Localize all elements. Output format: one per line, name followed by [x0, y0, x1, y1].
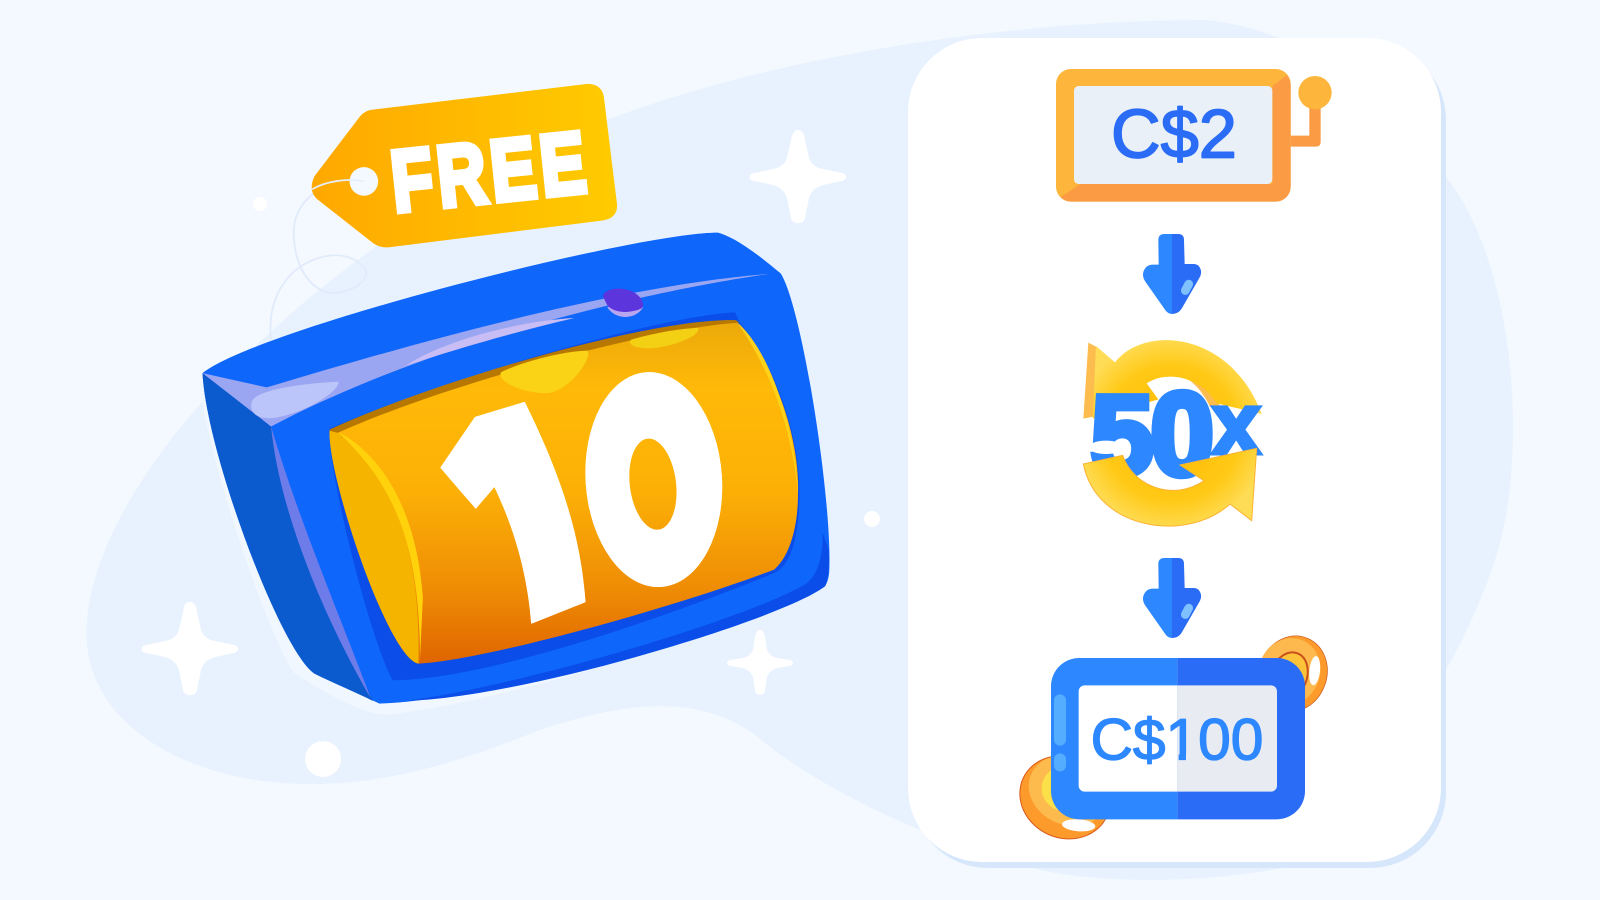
coin face [1017, 743, 1119, 838]
top bevel [203, 274, 770, 426]
upper arrow inner shade [1187, 378, 1222, 410]
tag body [312, 84, 617, 247]
sparkle: lower left [142, 602, 238, 695]
purple knob [607, 301, 643, 317]
letter x: x [1212, 374, 1261, 472]
panel: white card [908, 38, 1441, 862]
reel left side [330, 431, 419, 664]
reel left edge light [338, 432, 423, 663]
bottom right shade [406, 533, 829, 701]
50x label [1091, 370, 1261, 500]
arrow down 2 [1143, 558, 1201, 638]
left face [203, 373, 373, 701]
flow icons upper [1056, 69, 1332, 526]
slot frame shade [1061, 75, 1291, 202]
screen right [1177, 685, 1277, 792]
illustration: slot reel with free tag [200, 84, 829, 736]
sparkle: top center [750, 130, 846, 223]
arrow glint [1179, 602, 1195, 620]
string end [312, 180, 364, 189]
left face highlight [271, 426, 371, 698]
amount C$100: C$100 [1091, 707, 1263, 772]
corner highlight [251, 382, 338, 418]
arrow left half [1143, 234, 1172, 314]
icon: slot machine C$2 [1056, 69, 1332, 202]
coin: bottom left [1006, 741, 1124, 853]
coin glint [1308, 656, 1322, 686]
upper arrow shade [1083, 343, 1097, 419]
arrow right half [1172, 558, 1201, 638]
arrow down 1 [1143, 234, 1201, 314]
purple knob top [603, 289, 643, 312]
flow icons lower [1019, 558, 1328, 840]
amount C$2: C$2 [1111, 95, 1237, 172]
counter white of 0 [1172, 415, 1195, 457]
ticket left [1051, 658, 1177, 819]
panel: white card shadow [912, 44, 1446, 868]
coin: top right [1247, 625, 1339, 723]
sparkle: small lower [727, 630, 793, 695]
reel [330, 320, 798, 664]
price tag [312, 84, 617, 247]
side light short [1054, 753, 1066, 771]
bevel highlight [406, 318, 575, 366]
lower arrow [1083, 448, 1257, 526]
inner rim [330, 312, 800, 680]
side light long [1054, 694, 1066, 746]
digit 5: 5 [1091, 373, 1154, 500]
tag string [270, 181, 366, 340]
ticket right [1177, 658, 1305, 819]
number 0: 0 [559, 301, 748, 661]
dot: upper left [253, 197, 267, 211]
screen left [1079, 685, 1177, 792]
lever ball [1298, 76, 1332, 109]
digit 0: 0 [1151, 370, 1214, 500]
tag hole [350, 167, 378, 196]
halo behind box [200, 381, 787, 715]
FREE label: FREE [387, 114, 595, 231]
arrow glint [1179, 278, 1195, 296]
reel glare small [630, 328, 698, 348]
5 white notch [1089, 441, 1123, 454]
arrow left half [1143, 558, 1172, 638]
coin glint [1062, 818, 1096, 832]
arrow right half [1172, 234, 1201, 314]
number 1: 1 [394, 321, 662, 736]
reel glare large [501, 351, 588, 393]
upper arrow [1093, 340, 1262, 419]
reel top shadow [330, 320, 739, 436]
coin edge [1006, 741, 1124, 853]
box body [203, 233, 829, 704]
reel right edge light [737, 322, 798, 494]
slot screen [1074, 86, 1272, 184]
coin face [1248, 629, 1331, 715]
dot: centre right [864, 511, 880, 527]
coin inner [1262, 647, 1315, 707]
ticket C$100 [1051, 658, 1305, 819]
slot box [203, 233, 829, 736]
lever [1291, 103, 1321, 147]
dot: bottom left [305, 741, 341, 777]
coin edge [1247, 625, 1339, 723]
icon: 50x cycle [1083, 340, 1262, 526]
coin inner [1042, 765, 1092, 812]
slot frame [1056, 69, 1291, 202]
